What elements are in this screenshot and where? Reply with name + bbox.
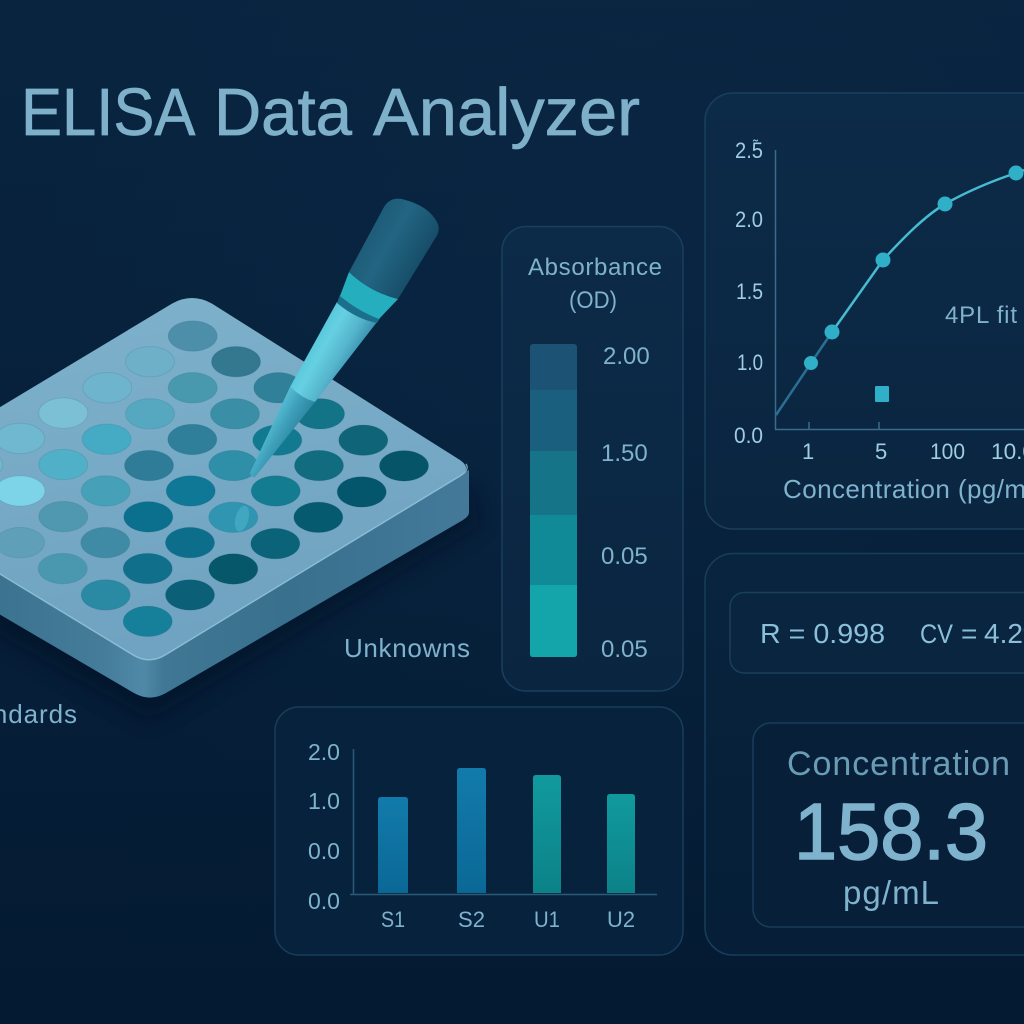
x axis labels: 1 — [802, 439, 814, 464]
plate edge highlight — [0, 464, 467, 660]
concentration value: 158.3 — [794, 787, 988, 876]
plate top surface — [0, 298, 466, 660]
y axis labels — [308, 739, 340, 914]
panel: results — [705, 554, 1024, 955]
y axis labels: 2.0 — [735, 207, 763, 232]
unknown sample marker — [875, 386, 889, 402]
x axis labels — [802, 439, 1024, 464]
stats box: CV — [920, 619, 953, 649]
stats box — [730, 592, 1024, 673]
y axis labels: 1.0 — [737, 350, 763, 375]
panel: standard curve — [705, 93, 1024, 529]
y axis labels: 2.0 — [308, 739, 340, 765]
4PL fit curve — [776, 170, 1024, 415]
pipette body — [290, 302, 377, 402]
x axis labels: U1 — [534, 907, 560, 932]
icon: pipette — [250, 199, 439, 477]
title: ELISA — [21, 75, 196, 150]
y axis labels: 1.5 — [736, 279, 763, 304]
x axis labels: S2 — [458, 907, 485, 932]
y axis labels: 0.0 — [308, 888, 340, 914]
axes — [350, 749, 657, 894]
x axis labels: U2 — [607, 907, 635, 932]
pipette tip — [250, 387, 315, 477]
title: Analyzer — [373, 75, 640, 150]
stats box: R = 0.998 — [760, 618, 885, 649]
y axis labels: ˜ — [752, 137, 759, 154]
x axis labels: S1 — [381, 907, 405, 932]
panel: absorbance scale — [502, 226, 683, 691]
y axis labels: 1.0 — [308, 788, 340, 814]
title: Data — [214, 75, 353, 150]
x axis labels — [381, 907, 635, 932]
concentration box: pg/mL — [843, 874, 939, 911]
bars — [378, 768, 635, 893]
droplet highlight — [232, 504, 252, 533]
stats box: = — [961, 618, 977, 649]
standard points — [804, 166, 1024, 370]
panel: bar chart — [275, 707, 683, 955]
pipette dark band — [337, 295, 380, 323]
axes — [776, 150, 1024, 430]
panel: absorbance scale: (OD) — [569, 287, 617, 314]
pipette cap — [349, 199, 439, 299]
x axis labels: 100 — [930, 439, 965, 464]
scale labels: 0.05 — [601, 543, 648, 570]
pipette collar — [340, 272, 398, 319]
label: unknowns: Unknowns — [344, 633, 470, 663]
fit label: 4PL fit — [945, 302, 1017, 329]
illustration: microplate — [0, 298, 480, 719]
scale labels — [601, 343, 650, 663]
scale labels: 2.00 — [603, 343, 650, 370]
heading: Absorbance — [528, 254, 662, 281]
y axis labels: 0.0 — [734, 423, 763, 448]
x axis labels: 5 — [875, 439, 887, 464]
colour scale bar — [530, 344, 577, 657]
plate side wall — [0, 470, 469, 698]
y axis labels: 2.5 — [735, 138, 763, 163]
y axis labels: 0.0 — [308, 838, 340, 864]
concentration box: Concentration — [787, 745, 1010, 783]
scale labels: 0.05 — [601, 636, 648, 663]
scale labels: 1.50 — [601, 440, 648, 467]
y axis labels — [734, 137, 763, 448]
wells — [0, 321, 428, 637]
concentration box — [753, 723, 1024, 927]
